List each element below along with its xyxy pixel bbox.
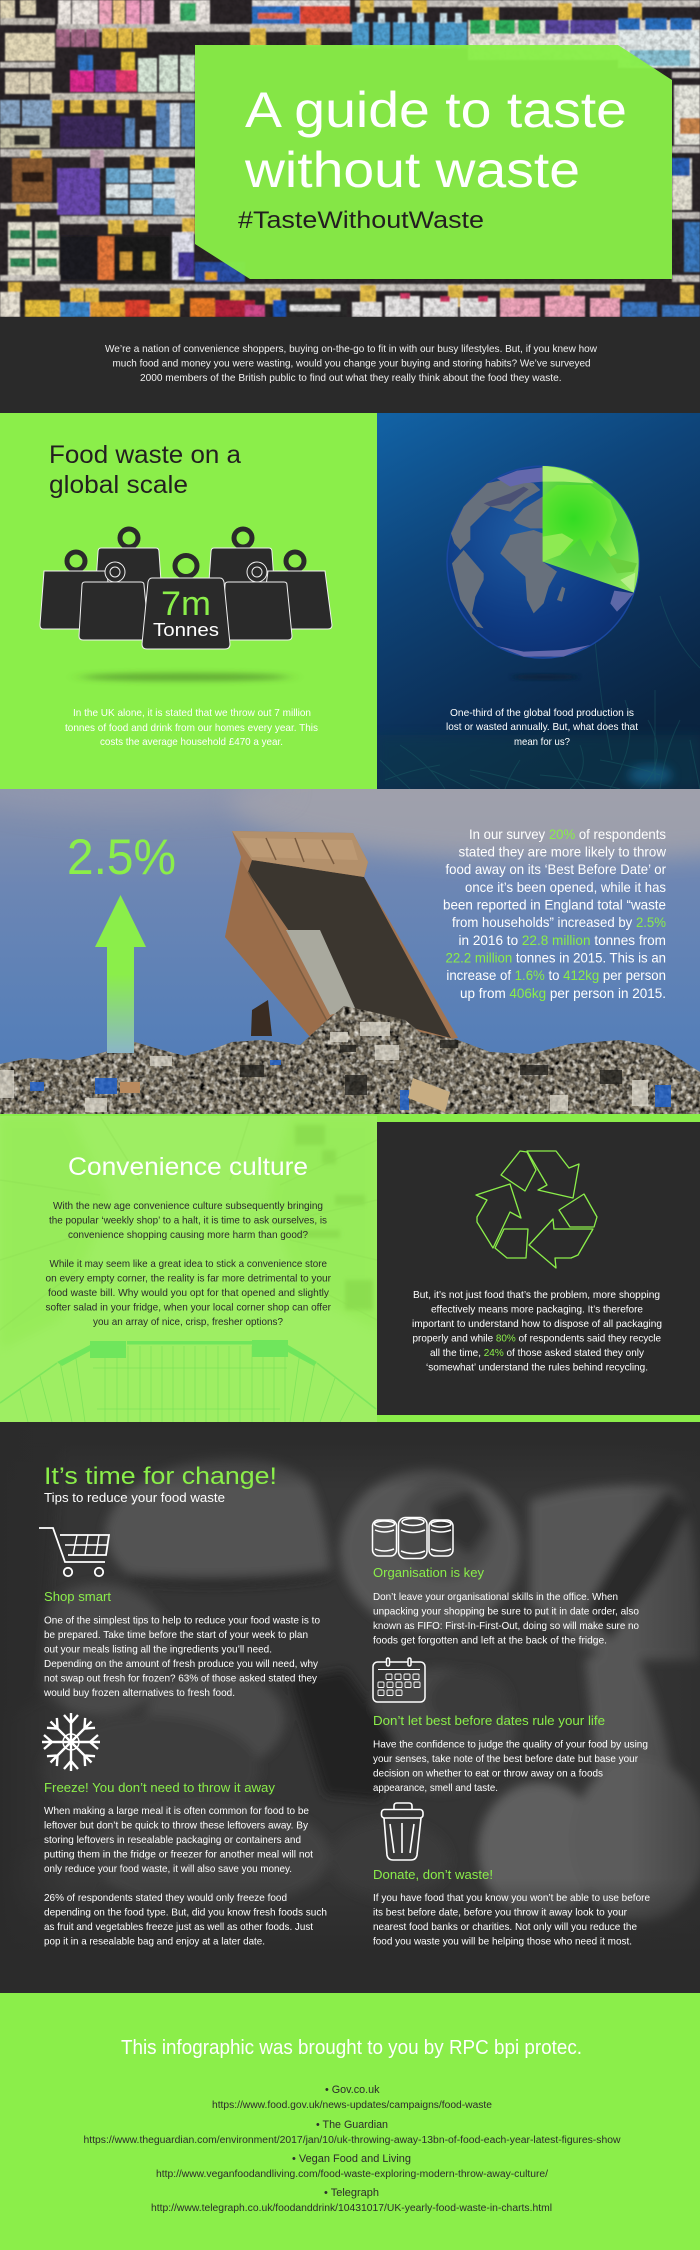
body text	[412, 1289, 662, 1374]
intro band	[0, 317, 700, 413]
source list: • Vegan Food and Living	[292, 2153, 411, 2165]
tip text: nearest food banks or charities. Not only will you reduce the	[373, 1921, 637, 1933]
caption	[446, 707, 638, 748]
body text: important to understand how to dispose of all packaging	[412, 1318, 662, 1330]
panel: convenience culture	[0, 1114, 700, 1422]
tip text: Depending on the amount of fresh produce you will need, why	[44, 1658, 319, 1670]
intro text	[105, 343, 597, 384]
weights illustration	[40, 529, 332, 681]
source list: http://www.veganfoodandliving.com/food-waste-exploring-modern-throw-away-culture/	[156, 2169, 548, 2180]
source list: http://www.telegraph.co.uk/foodanddrink/10431017/UK-yearly-food-waste-in-charts.html	[151, 2203, 552, 2214]
tip text: its best before date, before you throw it away look to your	[373, 1906, 627, 1918]
tip text: One of the simplest tips to help to reduce your food waste is to	[44, 1614, 320, 1626]
tip heading: Donate, don’t waste!	[373, 1867, 493, 1882]
survey text: increase of 1.6% to 412kg per person	[446, 967, 666, 983]
survey text: in 2016 to 22.8 million tonnes from	[458, 932, 666, 948]
tip text: leftover but don’t be quick to throw these leftovers away. By	[44, 1820, 309, 1832]
source list	[84, 2084, 621, 2214]
survey text: up from 406kg per person in 2015.	[460, 985, 666, 1001]
survey text: stated they are more likely to throw	[458, 844, 667, 860]
panel: landfill statistic	[0, 789, 700, 1114]
tip heading: Freeze! You don’t need to throw it away	[44, 1780, 275, 1795]
tip text: 26% of respondents stated they would only freeze food	[44, 1892, 287, 1904]
heading: Convenience culture	[68, 1153, 308, 1181]
tip: best before dates	[373, 1658, 648, 1794]
caption: lost or wasted annually. But, what does that	[446, 721, 638, 733]
panel: it's time for change	[36, 1455, 700, 1946]
tip text: storing leftovers in resealable packaging or containers and	[44, 1834, 301, 1846]
survey text: In our survey 20% of respondents	[469, 826, 666, 842]
hero title panel	[195, 45, 672, 279]
body text: the popular ‘weekly shop’ to a halt, it is time to ask ourselves, is	[49, 1214, 327, 1226]
body text: But, it’s not just food that’s the problem, more shopping	[413, 1289, 660, 1301]
tonnes label: Tonnes	[153, 620, 219, 640]
panel: one third of global food	[377, 413, 700, 789]
land masses	[451, 466, 639, 657]
body text: With the new age convenience culture subsequently bringing	[53, 1200, 323, 1212]
source list: • Telegraph	[324, 2187, 379, 2199]
icon: snowflake	[42, 1713, 100, 1771]
tip text: would buy frozen alternatives to fresh food.	[43, 1687, 235, 1699]
heading: Food waste on a	[49, 441, 241, 469]
hero: supermarket shelves photo	[0, 0, 700, 317]
tip text: foods get forgotten and left at the back of the fridge.	[373, 1634, 607, 1646]
body text: on every empty corner, the reality is far more detrimental to your	[46, 1272, 331, 1284]
icon: rubbish bin	[382, 1803, 423, 1860]
food photo background	[38, 1456, 700, 1924]
tip: shop smart	[39, 1528, 320, 1699]
hashtag: #TasteWithoutWaste	[238, 207, 484, 234]
tip: donate	[373, 1803, 650, 1948]
body text: softer salad in your fridge, when your local corner shop can offer	[46, 1302, 331, 1314]
heading: It’s time for change!	[44, 1463, 277, 1490]
tip: organisation	[372, 1518, 639, 1646]
survey text: once it’s been opened, while it has	[465, 879, 666, 895]
icon: tin cans	[372, 1518, 453, 1558]
tip text: depending on the food type. But, did you know fresh foods such	[44, 1906, 327, 1918]
tip text: Don’t leave your organisational skills in the office. When	[373, 1591, 618, 1603]
tip text: your senses, take note of the best before date but base your	[373, 1753, 638, 1765]
tip text: unpacking your shopping be sure to put it in date order, also	[373, 1606, 639, 1618]
globe	[447, 466, 639, 658]
tip text: be prepared. Take time before the start of your week to plan	[44, 1629, 308, 1641]
icon: calendar	[373, 1658, 425, 1702]
body text: convenience shopping causing more harm than good?	[68, 1229, 308, 1241]
survey text: been reported in England total “waste	[443, 896, 666, 912]
panel: food waste on a global scale	[0, 413, 377, 789]
tip: freeze	[42, 1713, 327, 1948]
body text: all the time, 24% of those asked stated they only	[430, 1347, 645, 1359]
intro text: much food and money you were wasting, would you change your buying and storing habits? We’ve surveyed	[112, 358, 591, 370]
tip text: When making a large meal it is often common for food to be	[44, 1805, 309, 1817]
body text: effectively means more packaging. It’s therefore	[431, 1304, 643, 1316]
tip text: putting them in the fridge or freezer for another meal will not	[44, 1848, 313, 1860]
survey text	[443, 826, 667, 1001]
body text: In the UK alone, it is stated that we throw out 7 million	[73, 707, 311, 719]
title	[244, 82, 627, 198]
body text: While it may seem like a great idea to stick a convenience store	[50, 1258, 327, 1270]
tip text	[44, 1805, 327, 1948]
tip heading: Organisation is key	[373, 1565, 484, 1580]
7m label: 7m	[161, 585, 211, 623]
tip text: pop it in a resealable bag and enjoy at a later date.	[44, 1936, 265, 1948]
tip heading: Shop smart	[44, 1589, 111, 1604]
up arrow	[95, 895, 146, 1053]
tipper truck	[225, 831, 458, 1058]
source list: • The Guardian	[316, 2119, 388, 2131]
2.5% statistic: 2.5%	[67, 829, 176, 885]
survey text: from households” increased by 2.5%	[452, 914, 666, 930]
tip text	[373, 1591, 639, 1646]
tip heading: Don’t let best before dates rule your life	[373, 1713, 605, 1728]
seabed grass	[377, 596, 700, 789]
body text	[46, 1200, 331, 1328]
tip text: only reduce your food waste, it will also save you money.	[44, 1863, 292, 1875]
source list: • Gov.co.uk	[325, 2084, 380, 2096]
footer heading: This infographic was brought to you by RPC bpi protec.	[121, 2037, 582, 2059]
heading: global scale	[49, 471, 188, 499]
tip text: Have the confidence to judge the quality of your food by using	[373, 1738, 648, 1750]
caption: One-third of the global food production is	[450, 707, 634, 719]
tip text: not swap out fresh for frozen? 63% of those asked stated they	[44, 1672, 318, 1684]
tip text: as fruit and vegetables freeze just as well as other foods. Just	[44, 1921, 313, 1933]
title: A guide to taste	[245, 82, 627, 138]
body text: tonnes of food and drink from our homes every year. This	[65, 722, 318, 734]
tip text	[43, 1614, 320, 1699]
body text: you an array of nice, crisp, fresher options?	[93, 1316, 283, 1328]
blurred aisle and trolley	[0, 1116, 377, 1422]
tip text: decision on whether to eat or throw away on a foods	[373, 1768, 603, 1780]
survey text: food away on its ‘Best Before Date’ or	[446, 861, 666, 877]
body text: food waste bill. Why would you opt for that opened and slightly	[48, 1287, 330, 1299]
tip text	[373, 1738, 648, 1794]
panel: packaging and recycling	[377, 1122, 700, 1415]
source list: https://www.theguardian.com/environment/2017/jan/10/uk-throwing-away-13bn-of-food-each-year-latest-figures-show	[84, 2135, 621, 2146]
title: without waste	[244, 142, 580, 198]
source list: https://www.food.gov.uk/news-updates/campaigns/food-waste	[212, 2100, 492, 2111]
intro text: 2000 members of the British public to find out what they really think about the food they waste.	[140, 372, 562, 384]
footer: sources	[0, 1993, 700, 2250]
tip text: known as FIFO: First-In-First-Out, doing so will make sure no	[373, 1620, 639, 1632]
icon: shopping cart	[39, 1528, 109, 1576]
tip text	[373, 1892, 650, 1948]
waste pile	[0, 1000, 700, 1116]
tip text: If you have food that you know you won’t be able to use before	[373, 1892, 650, 1904]
body text	[65, 707, 318, 748]
body text: properly and while 80% of respondents said they recycle	[412, 1332, 661, 1344]
icon: recycling arrows	[476, 1151, 597, 1268]
body text: costs the average household £470 a year.	[100, 736, 283, 748]
subheading: Tips to reduce your food waste	[44, 1490, 225, 1505]
tip text: appearance, smell and taste.	[373, 1782, 498, 1794]
body text: ‘somewhat’ understand the rules behind recycling.	[426, 1362, 648, 1374]
caption: mean for us?	[514, 736, 570, 748]
tip text: out your meals listing all the ingredients you’ll need.	[44, 1643, 272, 1655]
tip text: food you waste you will be helping those who need it most.	[373, 1936, 632, 1948]
heading	[49, 441, 241, 499]
survey text: 22.2 million tonnes in 2015. This is an	[446, 950, 666, 966]
intro text: We’re a nation of convenience shoppers, buying on-the-go to fit in with our busy lifestyles. But, if you knew how	[105, 343, 597, 355]
